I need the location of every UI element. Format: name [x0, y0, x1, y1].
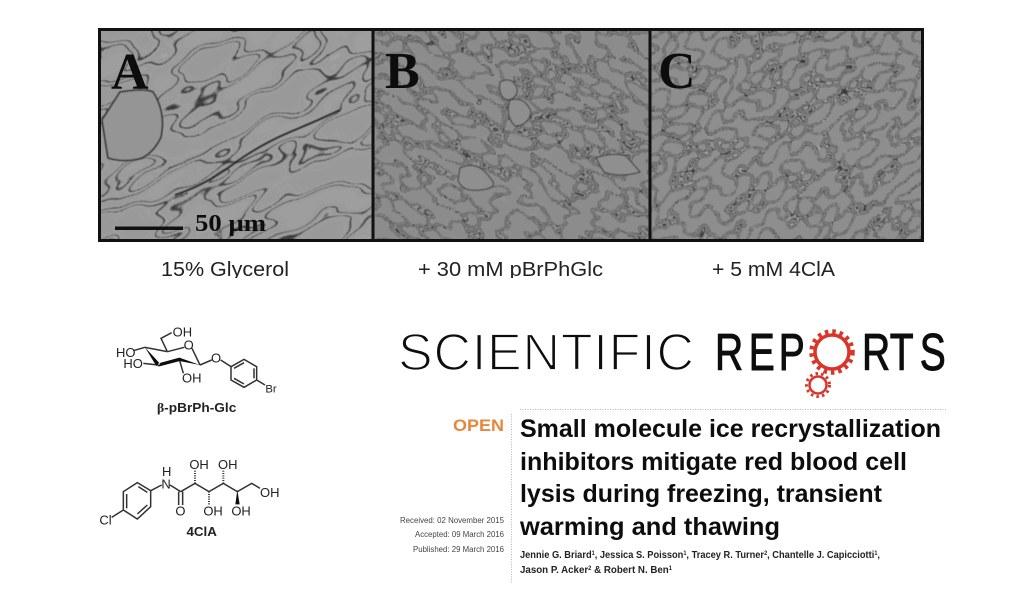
micrograph panel B: 30 mM pBrPhGlc	[374, 31, 648, 239]
micrograph panel A: 15% glycerol	[101, 31, 372, 239]
chemical structure: beta-pBrPh-Glc: HO	[116, 345, 135, 360]
authors: , Chantelle J. Capicciotti	[767, 550, 875, 561]
chemical structure: 4ClA	[99, 457, 279, 539]
panel frames	[100, 29, 922, 241]
article title: lysis during freezing, transient	[520, 480, 883, 508]
article title: Small molecule ice recrystallization	[520, 415, 941, 443]
label: 4ClA: 4ClA	[186, 524, 217, 539]
wordmark: REP: REP	[715, 322, 805, 381]
chemical structure: 4ClA: OH	[218, 457, 237, 472]
chemical structure: 4ClA: OH	[203, 504, 223, 519]
chemical structure: beta-pBrPh-Glc: Br	[265, 383, 277, 395]
chemical structure: 4ClA: OH	[231, 504, 251, 519]
scale bar	[115, 211, 266, 237]
chemical structure: beta-pBrPh-Glc: OH	[182, 371, 201, 386]
authors	[520, 550, 880, 576]
scale bar: 50 µm	[195, 211, 266, 237]
authors: & Robert N. Ben	[591, 565, 669, 576]
icon: small red gear	[806, 374, 830, 396]
authors: 1	[669, 566, 673, 572]
authors: Jennie G. Briard	[520, 550, 597, 561]
publication dates: Received: 02 November 2015	[400, 516, 505, 525]
large grain in panel A	[102, 90, 162, 160]
dotted rules	[512, 410, 946, 584]
article title: inhibitors mitigate red blood cell	[520, 448, 907, 476]
chemical structure: 4ClA: Cl	[99, 512, 112, 527]
micrograph panel C: 5 mM 4ClA	[652, 31, 921, 239]
caption A: 15% Glycerol	[161, 258, 289, 281]
chemical structure: beta-pBrPh-Glc: OH	[173, 324, 192, 339]
OPEN label: OPEN	[453, 416, 504, 435]
chemical structure: 4ClA: N	[161, 476, 171, 491]
panel letter A: A	[111, 44, 149, 101]
authors: , Jessica S. Poisson	[595, 550, 683, 561]
publication dates: Published: 29 March 2016	[413, 545, 505, 554]
publication dates: Accepted: 09 March 2016	[415, 530, 505, 539]
chemical structure: beta-pBrPh-Glc: O	[211, 350, 221, 365]
wordmark: RTS: RTS	[862, 322, 946, 381]
icon: large red gear	[812, 332, 852, 372]
journal logo: Scientific Reports	[398, 322, 946, 396]
chemical structure: beta-pBrPh-Glc	[116, 324, 277, 415]
article title: warming and thawing	[519, 513, 780, 541]
panel letter B: B	[385, 43, 420, 100]
authors: 2	[588, 566, 592, 572]
authors: 1	[683, 551, 687, 557]
wordmark: SCIENTIFIC: SCIENTIFIC	[398, 324, 694, 382]
chemical structure: beta-pBrPh-Glc: HO	[123, 356, 143, 371]
authors: ,	[877, 550, 880, 561]
infographic canvas	[98, 28, 946, 582]
caption B: + 30 mM pBrPhGlc	[418, 258, 603, 281]
chemical structure: 4ClA: H	[162, 464, 171, 479]
captions	[161, 258, 835, 281]
authors: Jason P. Acker	[520, 565, 590, 576]
publication dates	[400, 516, 505, 554]
authors: 1	[874, 551, 878, 557]
chemical structure: 4ClA: OH	[260, 485, 279, 500]
chemical structure: beta-pBrPh-Glc: O	[184, 338, 194, 353]
authors: 2	[764, 551, 768, 557]
caption C: + 5 mM 4ClA	[712, 258, 835, 281]
authors: 1	[592, 551, 595, 557]
panel letter C: C	[658, 43, 696, 100]
article title	[519, 415, 941, 541]
chemical structure: 4ClA: OH	[189, 457, 209, 472]
authors: , Tracey R. Turner	[686, 550, 764, 561]
label: beta-pBrPh-Glc: β-pBrPh-Glc	[157, 401, 236, 415]
chemical structure: 4ClA: O	[175, 504, 185, 519]
larger grains in panel B	[458, 80, 640, 190]
